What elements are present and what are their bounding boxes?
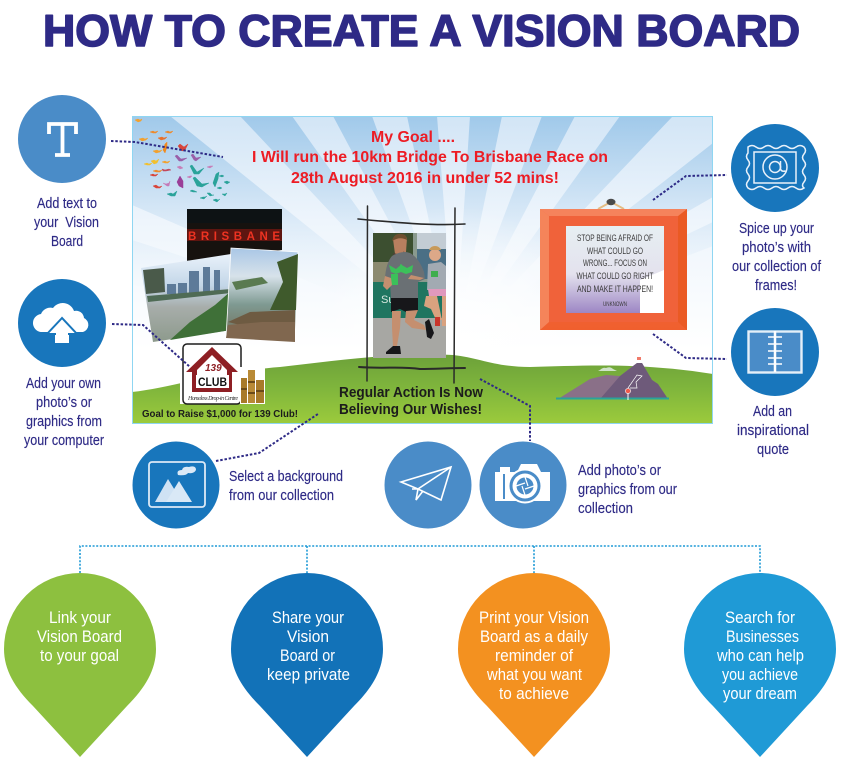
picture frame with quote: WHAT COULD GO [587,246,643,257]
text: collection caption: graphics from our [578,481,677,498]
text: goal headline [252,129,608,187]
text: add text caption: Add text to [37,195,97,212]
text: background caption: Select a background [229,468,343,485]
text: upload caption [24,375,104,449]
photo: Brisbane sign at night [187,209,282,261]
picture frame with quote: UNKNOWN [603,301,627,308]
text: add text caption: your Vision [34,214,99,231]
pin: link to goal: to your goal [40,647,119,665]
pin: share: Board or [280,647,335,665]
text: frames caption: our collection of [732,258,822,275]
pin: link to goal: Link your [49,609,111,627]
text: frames caption [732,220,822,294]
sketch frame lines [358,206,465,383]
man runner [393,238,407,254]
arrow: frame connector [653,175,727,200]
icon: camera [480,442,566,528]
logo: 139 Club: 139 [205,363,222,374]
logo: 139 Club: CLUB [198,377,227,389]
photo: city river view [141,254,231,342]
text: frames caption: frames! [755,277,797,294]
logo: 139 Club: Homeless Drop-in Centre [187,396,238,402]
arrow: text connector [111,141,223,157]
title: HOW TO CREATE A VISION BOARD [43,7,800,56]
pin: search businesses: who can help [716,647,804,665]
connector: dotted tree to pins [80,546,760,573]
text: upload caption: photo’s or [36,394,92,411]
text: quote caption: inspirational [737,422,809,439]
picture frame with quote: WHAT COULD GO RIGHT [576,271,654,282]
arrow: background connector [216,414,318,461]
picture frame with quote [540,199,687,330]
icon: upload cloud [18,279,106,367]
text: upload caption: Add your own [26,375,101,392]
icon: flock of birds [135,119,230,202]
text: affirmation [339,385,484,418]
text: quote caption: quote [757,441,789,458]
pin: search businesses: Search for [725,609,795,627]
text: affirmation: Regular Action Is Now [339,385,484,401]
pin: search businesses: your dream [723,685,797,703]
text: background caption [229,468,343,504]
text: frames caption: photo’s with [742,239,811,256]
pin: print: reminder of [495,647,573,665]
text: upload caption: graphics from [26,413,102,430]
icon: stamp frame [731,124,819,212]
pin: link to goal [4,573,156,757]
icon: add text [18,95,106,183]
picture frame with quote: AND MAKE IT HAPPEN! [577,284,653,295]
pin: share: Share your [272,609,344,627]
text: add text caption: Board [51,233,83,250]
pin: search businesses: Businesses [726,628,799,646]
text: upload caption: your computer [24,432,104,449]
pin: share: Vision [287,628,329,646]
pin: print: what you want [486,666,582,684]
icon: background mountains [132,442,220,528]
pin: print [458,573,610,757]
pin: search businesses [684,573,836,757]
pin: share [231,573,383,757]
photo: runners in sketch frame [358,206,465,383]
logo: 139 Club [180,343,265,404]
pin: share: keep private [267,666,350,684]
pin: print: Print your Vision [479,609,589,627]
text: goal headline: 28th August 2016 in under 52 mins! [291,170,559,187]
text: frames caption: Spice up your [739,220,814,237]
girl runner [429,249,441,261]
text: goal headline: My Goal .... [371,129,455,146]
pin: link to goal: Vision Board [37,628,122,646]
text: background caption: from our collection [229,487,334,504]
text: collection caption: collection [578,500,633,517]
photo: river and rocks [226,248,298,342]
text: add text caption [34,195,99,250]
icon: open book [731,308,819,396]
pin: search businesses: you achieve [722,666,798,684]
arrow: upload connector [112,324,190,367]
text: quote caption [737,403,809,458]
icon: paper plane [384,442,472,528]
text: affirmation: Believing Our Wishes! [339,402,482,418]
background hills [132,354,713,424]
arrow: photo connector [480,379,530,441]
text: collection caption: Add photo’s or [578,462,661,479]
picture frame with quote: WRONG... FOCUS ON [583,258,647,269]
picture frame with quote: STOP BEING AFRAID OF [577,233,653,244]
illustration: mountain with flag [556,357,669,400]
arrow: quote connector [653,334,727,359]
photo: Brisbane sign at night: BRISBANE [188,231,280,243]
photo: runners in sketch frame: Su [381,294,394,306]
text: quote caption: Add an [753,403,792,420]
text: collection caption [578,462,677,517]
pin: print: to achieve [499,685,569,703]
panel: vision board [132,116,713,424]
pin: print: Board as a daily [480,628,589,646]
text: fundraising goal: Goal to Raise $1,000 for 139 Club! [142,408,298,420]
text: goal headline: I Will run the 10km Bridge To Brisbane Race on [252,149,608,166]
